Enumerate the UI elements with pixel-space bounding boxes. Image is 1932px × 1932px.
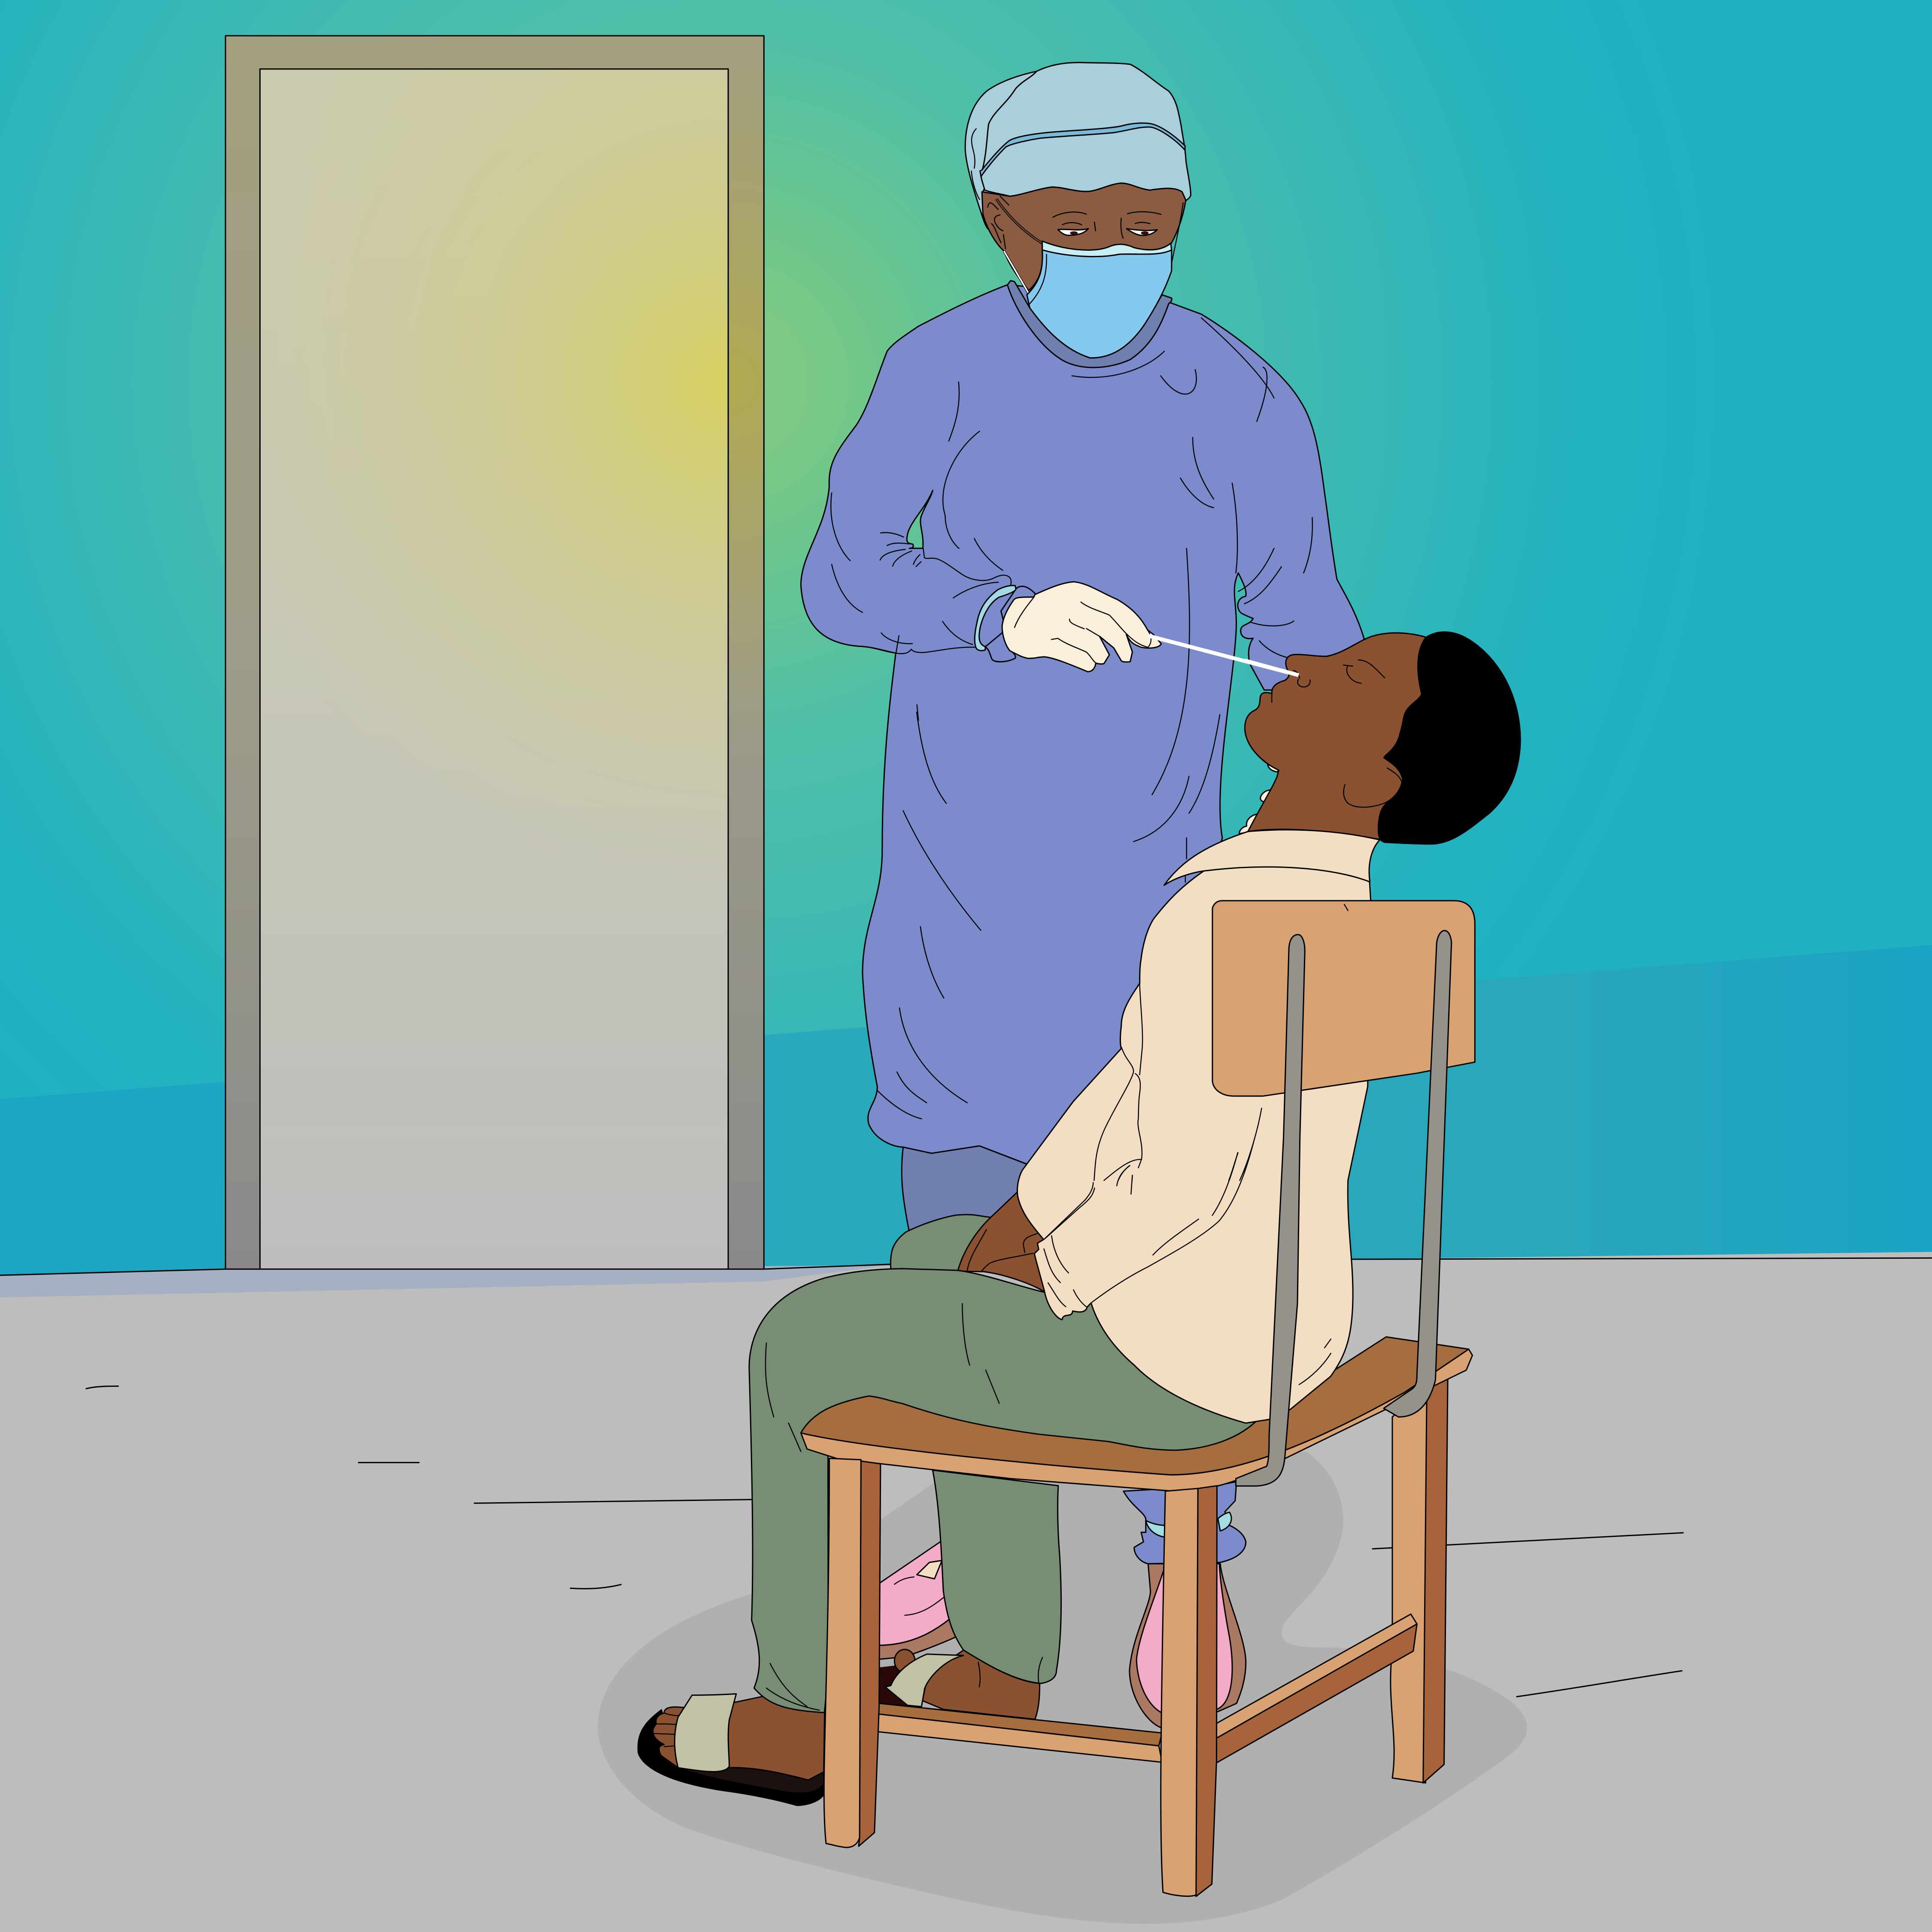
chair back mark bbox=[1344, 905, 1348, 911]
left leg side bbox=[859, 1461, 881, 1846]
door panel bbox=[260, 69, 728, 1269]
back of cap bbox=[965, 71, 1036, 231]
floor shadow bbox=[598, 1452, 1527, 1924]
patient trousers bbox=[749, 1269, 1282, 1713]
back sandal strap bbox=[885, 1654, 963, 1707]
nurse bbox=[801, 63, 1364, 1728]
gown wrinkles bbox=[831, 318, 1312, 1119]
back foot bbox=[922, 1650, 1040, 1719]
surgical cap bbox=[981, 63, 1191, 200]
right shoe outer bbox=[1130, 1564, 1246, 1728]
floor bbox=[0, 1252, 1932, 1932]
floor cracks bbox=[86, 1386, 1683, 1697]
patient hand bbox=[958, 1190, 1045, 1292]
right eye bbox=[1127, 229, 1157, 235]
sleeve lines bbox=[859, 515, 1011, 720]
shirt collar bbox=[1164, 830, 1380, 885]
side stretcher bbox=[1214, 1614, 1417, 1765]
back heel bbox=[894, 1649, 915, 1672]
cap folds bbox=[972, 129, 980, 200]
elastic cuff bbox=[1146, 1512, 1231, 1538]
floor threshold line bbox=[225, 1268, 764, 1270]
brows and creases bbox=[1053, 212, 1161, 238]
glove lines bbox=[1015, 597, 1151, 663]
gown bbox=[801, 285, 1364, 1164]
right leg side bbox=[1196, 1486, 1217, 1896]
front chair legs bbox=[824, 1458, 1217, 1896]
left metal rod bbox=[1236, 935, 1305, 1486]
patient rear trousers bbox=[890, 1215, 1017, 1272]
nurse head bbox=[965, 63, 1191, 368]
surgical mask bbox=[1027, 250, 1172, 358]
chair back bbox=[1212, 901, 1475, 1096]
door glow bbox=[261, 70, 727, 1056]
right shoe pink inner bbox=[1136, 1564, 1232, 1713]
right leg face bbox=[1161, 1488, 1198, 1896]
wall background bbox=[0, 0, 1932, 1282]
trouser wrinkles bbox=[766, 1303, 999, 1710]
swab stick bbox=[1148, 636, 1299, 675]
front sandal sole bbox=[638, 1709, 825, 1806]
back chair leg bbox=[1391, 1378, 1448, 1783]
ear and facial lines bbox=[1272, 660, 1402, 807]
face and neck bbox=[1245, 633, 1425, 839]
left pupil bbox=[1070, 231, 1078, 235]
cap band bbox=[980, 123, 1185, 176]
latex glove bbox=[1002, 582, 1161, 671]
right metal rod bbox=[1384, 930, 1452, 1417]
patient head bbox=[1164, 632, 1521, 885]
back trouser leg bbox=[933, 1470, 1061, 1683]
front sandal strap bbox=[674, 1694, 736, 1772]
cuff bbox=[975, 586, 1016, 651]
door bbox=[225, 36, 764, 1269]
nurse trouser cuff bbox=[1124, 1482, 1246, 1564]
nurse sleeve and hand bbox=[859, 515, 1161, 720]
front stretcher face bbox=[869, 1713, 1162, 1762]
floor edge line bbox=[0, 1258, 1932, 1275]
sandal inner bbox=[678, 1768, 824, 1793]
face bbox=[982, 183, 1186, 290]
right pupil bbox=[1141, 231, 1148, 235]
left leg face bbox=[824, 1458, 861, 1847]
left shoe detail bbox=[917, 1561, 942, 1579]
toe lines bbox=[653, 1713, 683, 1747]
door frame glow bbox=[729, 70, 762, 834]
ear lines and mask strap bbox=[987, 196, 1009, 249]
patient shirt bbox=[1017, 850, 1371, 1423]
mask nose band bbox=[1042, 241, 1172, 257]
seat front edge bbox=[801, 1349, 1473, 1491]
front stretcher top bbox=[869, 1704, 1162, 1746]
back sandal sole bbox=[876, 1665, 908, 1706]
lower mask strap bbox=[1004, 251, 1031, 297]
floor reflection bbox=[0, 1265, 887, 1297]
lower wall band bbox=[0, 945, 1932, 1276]
mask edge bbox=[1029, 203, 1183, 305]
left shoe sole bbox=[876, 1619, 957, 1659]
sleeve lobes bbox=[985, 586, 1036, 662]
gown neck band bbox=[1007, 281, 1172, 368]
mask ear loop bbox=[996, 199, 1046, 246]
hair bbox=[1378, 632, 1521, 844]
nurse hidden fingers near neck bbox=[1239, 765, 1280, 834]
patient legs and feet bbox=[638, 1470, 1061, 1806]
left eye bbox=[1058, 229, 1088, 235]
nurse trousers bbox=[902, 1146, 1027, 1232]
pink left shoe bbox=[876, 1541, 950, 1645]
shirt wrinkles upper bbox=[1094, 984, 1262, 1180]
swab tip bbox=[1245, 660, 1299, 675]
nurse lower leg and shoes bbox=[876, 1482, 1246, 1728]
shirt wrinkles lower bbox=[1044, 1138, 1331, 1385]
chair seat bbox=[801, 1337, 1473, 1491]
front foot bbox=[653, 1695, 825, 1780]
door frame bbox=[225, 36, 764, 1269]
